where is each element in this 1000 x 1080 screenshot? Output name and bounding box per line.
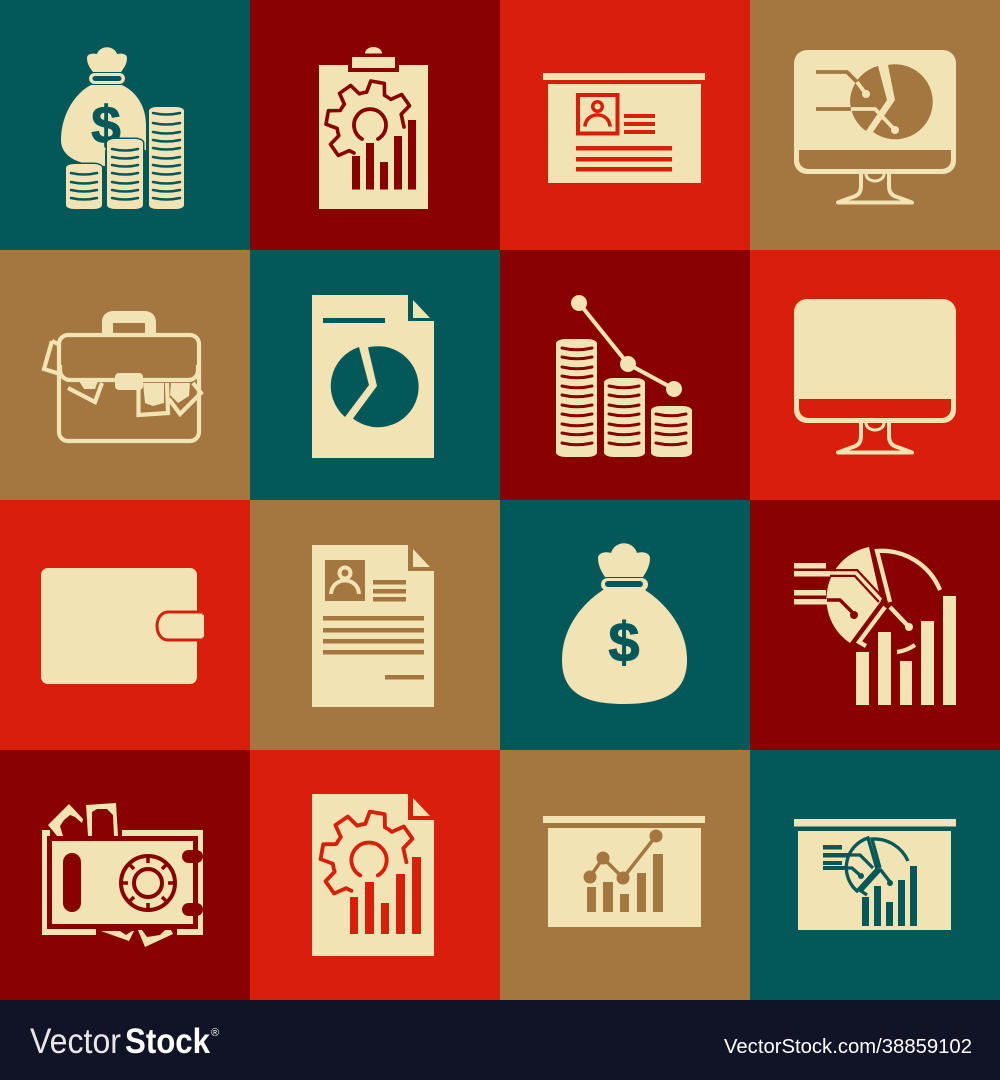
icon: large money bag: $: [608, 610, 640, 674]
footer: VectorStock logo: ®: [211, 1027, 219, 1039]
icon: safe with banknotes: [42, 803, 203, 947]
icon: money bag with coin stacks: [61, 47, 184, 209]
icon: document with pie chart: [312, 295, 434, 458]
icon: clipboard with gear and bars: [319, 47, 428, 209]
icon: wallet: [41, 568, 204, 684]
icon: pie chart with bar chart: [794, 547, 956, 705]
icon: large money bag: [562, 543, 687, 704]
icon: blank monitor: [794, 299, 956, 452]
icon: coin stacks with falling trend line: [556, 295, 692, 457]
footer: image id: VectorStock.com/38859102: [724, 1036, 972, 1058]
icon: presentation board with line and bar chart: [543, 816, 705, 927]
footer: VectorStock logo: [30, 1022, 219, 1061]
footer: VectorStock logo: Vector: [30, 1022, 121, 1061]
icon: money bag with coin stacks: $: [91, 96, 121, 155]
icon: briefcase with banknotes: [44, 311, 201, 441]
icon: monitor with pie chart: [794, 50, 956, 202]
footer: VectorStock logo: Stock: [125, 1022, 210, 1061]
icon: presentation board with profile: [543, 73, 705, 183]
icon: presentation board with pie and bar chart: [794, 819, 956, 930]
icon: document with gear and bars: [312, 794, 434, 956]
icon: resume document: [312, 545, 434, 707]
